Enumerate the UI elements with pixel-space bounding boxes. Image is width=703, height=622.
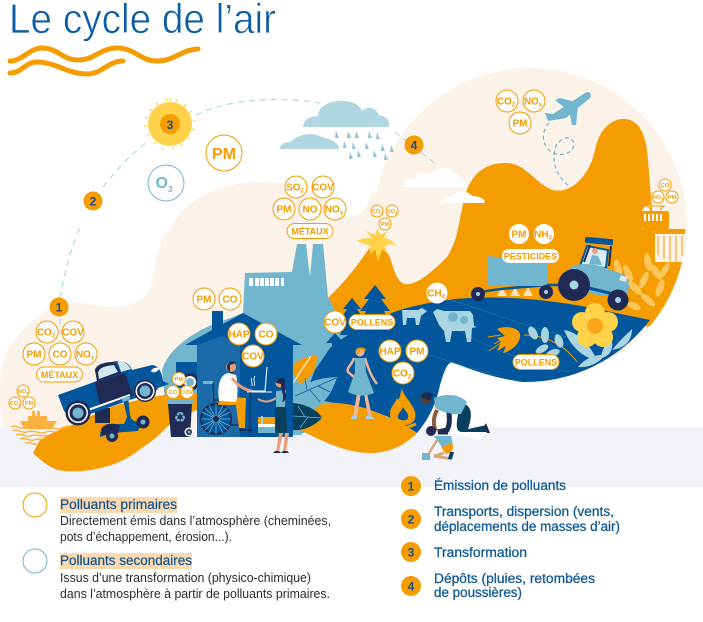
bubbles: car emissions: CO [37, 328, 52, 338]
bubbles: factory emissions: SO [286, 182, 301, 194]
bubbles: ship emissions: NO [18, 389, 26, 395]
legend: step 3 [401, 542, 527, 562]
bubbles: train emissions: NO [653, 195, 661, 201]
bubbles: volcano emissions: SO [387, 209, 395, 215]
badge 2 [84, 192, 102, 210]
legend: polluants primaires: pots d’échappement, érosion...). [60, 530, 232, 544]
icon: small cow [402, 308, 427, 325]
bubbles: ship emissions [9, 385, 35, 409]
peach background left blob [0, 182, 420, 427]
figure: man in wheelchair at desk [201, 362, 275, 437]
bubbles: factory emissions: NO [302, 204, 318, 216]
bubbles: plane emissions [496, 90, 545, 134]
icon: blue leaves [526, 325, 632, 367]
legend: step 4: Dépôts (pluies, retombées [434, 571, 595, 586]
bubbles: fire emissions: CO [393, 368, 408, 380]
legend: step 1: 1 [408, 480, 415, 494]
bubbles: car emissions: PM [26, 350, 42, 360]
icon: train [641, 205, 685, 231]
bubbles: volcano emissions [371, 205, 398, 230]
bubbles: tractor emissions: PESTICIDES [504, 252, 557, 262]
icon: recycling bin [167, 399, 194, 437]
dark blue ground [305, 297, 650, 433]
legend: step 2: Transports, dispersion (vents, [434, 504, 614, 519]
bubbles: factory emissions: MÉTAUX [291, 226, 329, 236]
orange hills and volcano [320, 119, 682, 370]
bubble: O3 secondary: O [156, 175, 168, 192]
icon: large cow [433, 309, 477, 342]
legend: step 3: Transformation [434, 545, 527, 560]
icon: scooter [100, 396, 150, 442]
legend: step 2: déplacements de masses d’air) [434, 519, 620, 534]
bubbles: heating emissions: PM [196, 294, 212, 306]
white bay below the circle [425, 362, 522, 440]
dashed transport arcs [60, 99, 437, 342]
bubbles: train emissions: x [661, 197, 663, 201]
bubbles: fire emissions [379, 340, 428, 384]
legend: polluants secondaires: Polluants secondaires [60, 553, 192, 568]
bubbles: plane emissions: PM [512, 118, 528, 130]
icon: tulip and stem [488, 327, 577, 362]
bubble: PM secondary: PM [212, 146, 236, 163]
bubbles: fire emissions: PM [410, 346, 424, 358]
legend: step 2 [401, 504, 620, 534]
bubbles: factory emissions: 2 [301, 188, 305, 194]
bubbles: tractor emissions: PM [512, 230, 526, 240]
viaduct [655, 230, 685, 262]
legend: step 2: 2 [408, 512, 415, 526]
bubble: PM secondary [206, 135, 242, 171]
icon: campfire [389, 388, 416, 434]
legend: step 1 [401, 476, 566, 496]
bubbles: ship emissions: x [26, 391, 28, 395]
icon: recycling bin: ♻ [174, 410, 186, 426]
legend: step 4: 4 [408, 580, 415, 594]
bubbles: bin emissions [166, 372, 194, 398]
plane dashed trail [543, 123, 574, 187]
bubbles: indoor pollutants: COV [242, 352, 264, 362]
bubbles: bin emissions: PM [175, 377, 184, 383]
bubbles: plane emissions: 2 [512, 102, 516, 108]
field furrow lines [380, 300, 610, 376]
icon: sun [144, 98, 195, 150]
icon: van behind house [176, 362, 199, 391]
bubbles: plane emissions: NO [524, 96, 539, 108]
legend: step 4: de poussières) [434, 585, 522, 600]
badge 4: 4 [411, 138, 418, 152]
icon: yellow flower [572, 303, 618, 347]
bubbles: heating emissions: CO [222, 294, 238, 306]
icon: sun: 3 [167, 118, 174, 132]
bubble: CH4: CH [427, 288, 442, 300]
bubbles: train emissions [652, 179, 678, 203]
bubbles: indoor pollutants [228, 323, 277, 367]
bubble: O3 secondary: 3 [168, 185, 173, 194]
figure: child [422, 426, 454, 460]
bubbles: car emissions [23, 321, 97, 382]
bubbles: bin emissions: CO [169, 390, 178, 396]
legend: polluants primaires: Directement émis dans l’atmosphère (cheminées, [60, 514, 331, 528]
bubbles: volcano emissions: 2 [380, 211, 382, 215]
bubbles: indoor pollutants: HAP [228, 330, 250, 340]
bubble: O3 secondary [148, 165, 184, 201]
legend: polluants secondaires: Issus d’une transformation (physico-chimique) [60, 571, 311, 585]
bubbles: car emissions: 2 [52, 334, 56, 340]
bubbles: factory emissions: x [340, 210, 344, 216]
icon: plane [545, 92, 591, 125]
bubbles: bin emissions: COV [181, 390, 193, 396]
bubble: pollens flower: POLLENS [515, 358, 557, 368]
badge 4 [404, 136, 424, 154]
bubbles: COV and pollens [324, 311, 395, 333]
bubbles: plane emissions: x [539, 102, 543, 108]
badge 1: 1 [56, 300, 63, 314]
bubbles: car emissions: x [91, 356, 95, 362]
bubbles: COV and pollens: POLLENS [351, 318, 393, 328]
bubbles: volcano emissions: 2 [395, 211, 397, 215]
factory windows [249, 278, 284, 286]
bubbles: tractor emissions: NH [534, 230, 549, 240]
bubbles: factory emissions: PM [276, 204, 292, 216]
bubbles: tractor emissions: 3 [549, 236, 553, 242]
icon: large leaves [293, 355, 337, 430]
bubbles: ship emissions: 2 [18, 403, 20, 407]
badge 2: 2 [90, 194, 97, 208]
bubbles: factory emissions: COV [312, 182, 334, 194]
title waves [10, 48, 198, 74]
bubbles: heating emissions [193, 288, 241, 310]
icon: white clouds [403, 168, 485, 203]
bubble: pollens flower [513, 354, 559, 370]
legend: polluants primaires [23, 493, 331, 544]
badge 1 [50, 298, 68, 316]
bubbles: train emissions: PM [668, 195, 677, 201]
bubbles: volcano emissions: CO [372, 209, 380, 215]
icon: tractor with sprayer [471, 237, 629, 310]
bubble: CH4 [426, 282, 448, 304]
orange ground left [33, 393, 197, 471]
bubbles: fire emissions: 2 [408, 374, 412, 380]
bubbles: train emissions: CO [661, 183, 670, 189]
bubbles: plane emissions: CO [497, 96, 512, 108]
grey ground band [0, 427, 703, 487]
legend: polluants secondaires [23, 549, 330, 601]
figure: kneeling adult [420, 392, 490, 433]
icon: pickup car [58, 360, 169, 426]
bubbles: indoor pollutants: CO [258, 330, 274, 340]
icon: ship on waves [11, 411, 70, 444]
bubbles: COV and pollens: COV [324, 318, 346, 328]
legend: step 3: 3 [408, 546, 415, 560]
factory and light blue hill [162, 244, 352, 437]
bubbles: car emissions: CO [52, 350, 68, 360]
legend: step 1: Émission de polluants [434, 478, 566, 493]
figure: woman in dress [348, 348, 377, 419]
bubbles: car emissions: MÉTAUX [41, 370, 78, 380]
legend: polluants secondaires: dans l’atmosphère à partir de polluants primaires. [60, 587, 330, 601]
bubbles: factory emissions [273, 176, 346, 238]
legend: step 4 [401, 571, 595, 600]
bubbles: car emissions: NO [76, 350, 91, 360]
bubbles: ship emissions: CO [10, 401, 18, 407]
bubbles: volcano emissions: PM [381, 222, 390, 228]
bubbles: tractor emissions [502, 224, 559, 263]
bubbles: ship emissions: PM [25, 401, 34, 407]
figure: standing woman [258, 378, 289, 453]
peach background right circle [373, 68, 687, 382]
icon: volcano lava [357, 229, 396, 262]
bubbles: factory emissions: NO [325, 204, 340, 216]
orange ground centre [293, 403, 417, 453]
icon: trees [326, 285, 390, 358]
icon: rain cloud [280, 101, 394, 160]
legend: polluants primaires: Polluants primaires [60, 497, 177, 512]
bubbles: car emissions: COV [62, 328, 84, 338]
icon: wheat [612, 253, 672, 312]
house [185, 311, 302, 437]
bubbles: fire emissions: HAP [379, 346, 401, 358]
bubble: CH4: 4 [442, 294, 446, 300]
